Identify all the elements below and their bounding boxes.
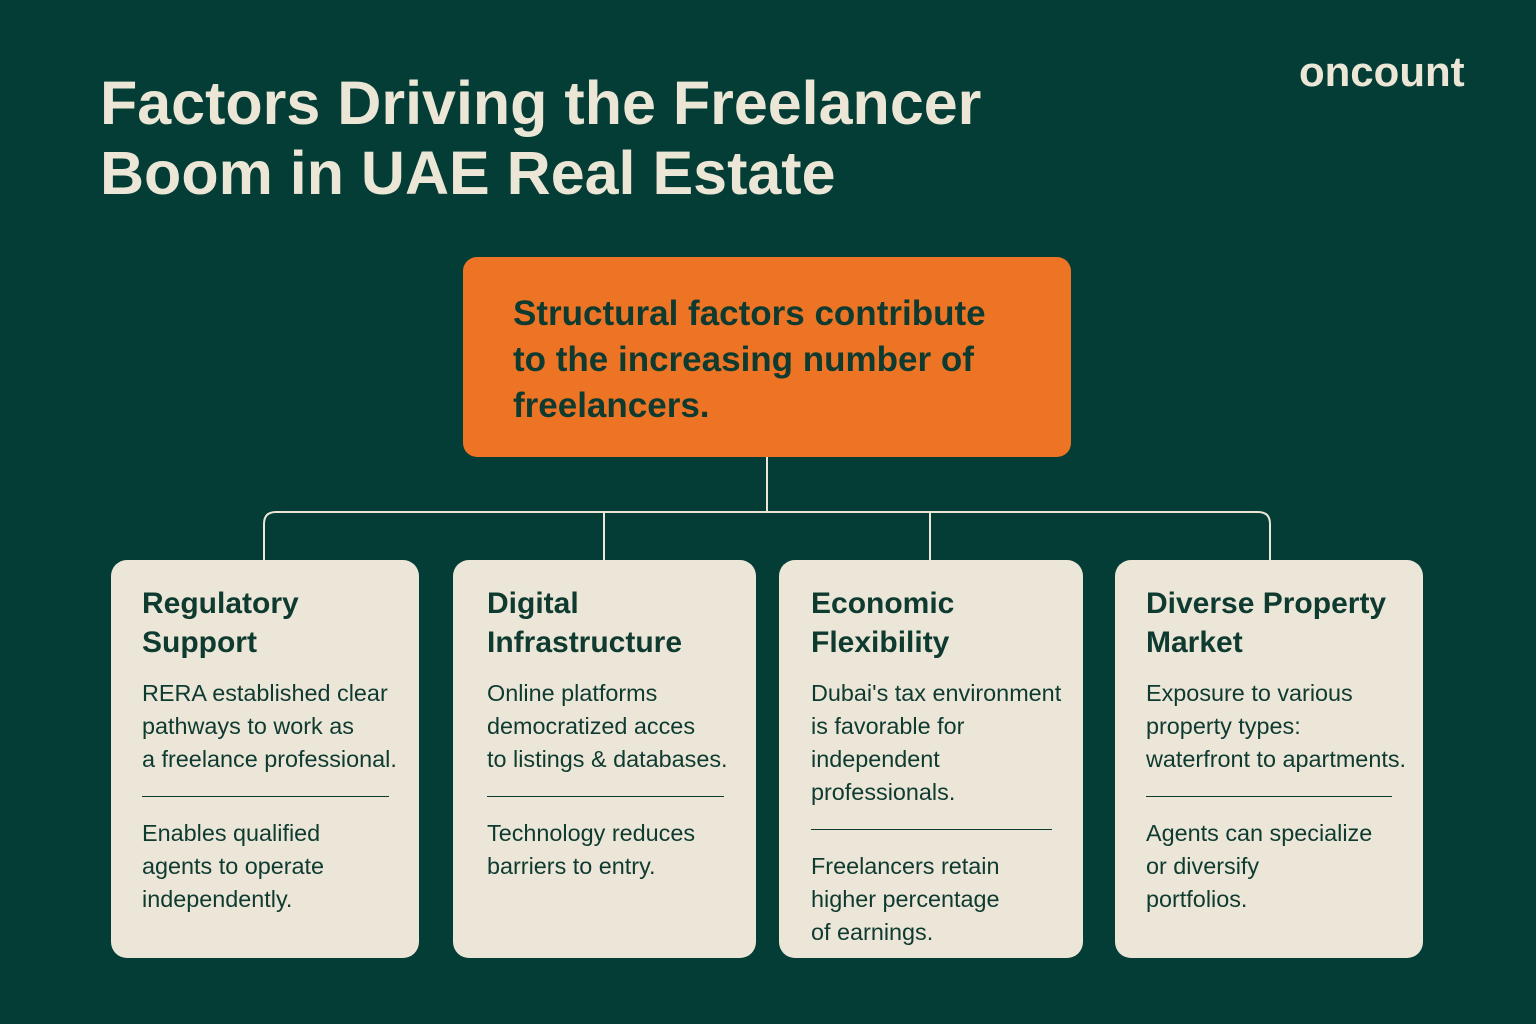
card: economic flexibility: is favorable for	[811, 713, 964, 739]
card: economic flexibility	[779, 560, 1083, 958]
title: Boom in UAE Real Estate	[100, 139, 836, 207]
card: economic flexibility: Dubai's tax environment	[811, 680, 1061, 706]
card: regulatory support	[111, 560, 419, 958]
card: economic flexibility: higher percentage	[811, 886, 1000, 912]
central callout: freelancers.	[513, 386, 710, 425]
card: regulatory support: RERA established clear	[142, 680, 388, 706]
card: diverse property market: portfolios.	[1146, 886, 1247, 912]
card: digital infrastructure: Online platforms	[487, 680, 657, 706]
title: Factors Driving the Freelancer	[100, 69, 981, 137]
card: digital infrastructure: Digital	[487, 587, 579, 620]
central callout: Structural factors contribute	[513, 294, 986, 333]
card: regulatory support: independently.	[142, 886, 292, 912]
card: diverse property market: Exposure to various	[1146, 680, 1353, 706]
card: digital infrastructure	[453, 560, 756, 958]
card: economic flexibility: Economic	[811, 587, 954, 620]
card: regulatory support: a freelance professional.	[142, 746, 397, 772]
card: diverse property market: waterfront to apartments.	[1146, 746, 1406, 772]
card: diverse property market: Diverse Property	[1146, 587, 1386, 620]
card: digital infrastructure: barriers to entry.	[487, 853, 656, 879]
card: digital infrastructure: Technology reduces	[487, 820, 695, 846]
card: regulatory support: Support	[142, 626, 257, 659]
logo: oncount	[1299, 48, 1465, 95]
card: diverse property market: property types:	[1146, 713, 1301, 739]
card: regulatory support: Enables qualified	[142, 820, 320, 846]
card: digital infrastructure: democratized acces	[487, 713, 695, 739]
title	[100, 69, 981, 207]
card: economic flexibility: of earnings.	[811, 919, 933, 945]
card: economic flexibility: independent	[811, 746, 940, 772]
card: regulatory support: agents to operate	[142, 853, 324, 879]
card: regulatory support: Regulatory	[142, 587, 299, 620]
card: regulatory support: pathways to work as	[142, 713, 354, 739]
card: digital infrastructure: Infrastructure	[487, 626, 682, 659]
card: diverse property market	[1115, 560, 1423, 958]
card: economic flexibility: Freelancers retain	[811, 853, 1000, 879]
card: economic flexibility: Flexibility	[811, 626, 949, 659]
card: digital infrastructure: to listings & databases.	[487, 746, 728, 772]
central callout	[463, 257, 1071, 457]
card: diverse property market: Market	[1146, 626, 1243, 659]
card: diverse property market: Agents can specialize	[1146, 820, 1372, 846]
card: economic flexibility: professionals.	[811, 779, 955, 805]
central callout: to the increasing number of	[513, 340, 974, 379]
card: diverse property market: or diversify	[1146, 853, 1259, 879]
